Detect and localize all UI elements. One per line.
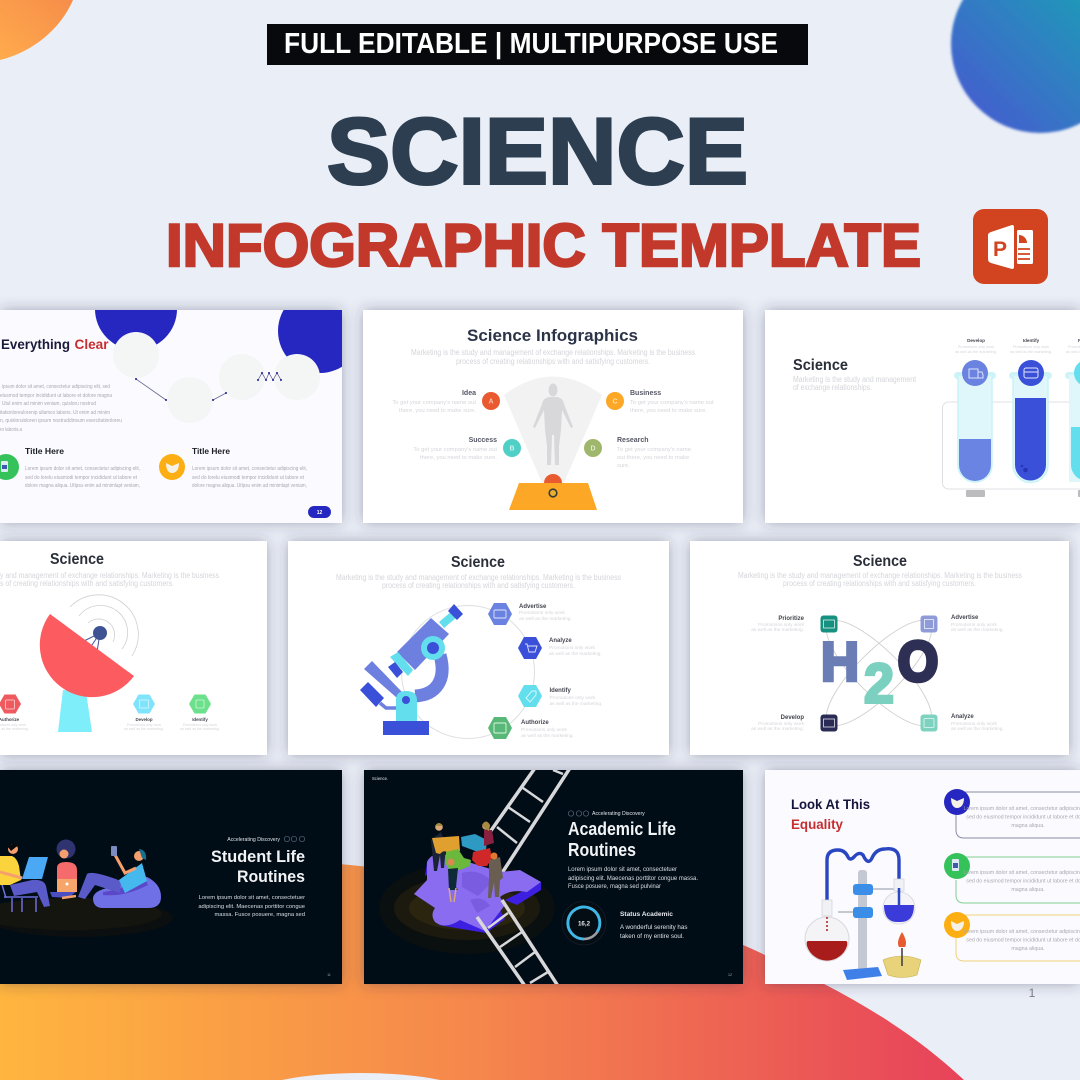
heading: Routines: [568, 840, 636, 860]
item: advertise: [488, 603, 572, 625]
item: business: To get your company's name out: [630, 400, 714, 406]
paragraph: n, quisloruisloren ipsum nostruddinsum exercitationloreu: [0, 418, 122, 424]
item: success: [413, 437, 521, 461]
ladder: upper: [490, 768, 570, 873]
item: yellow row: [944, 912, 1080, 961]
item: success: B: [509, 446, 515, 452]
item: research: [584, 437, 691, 469]
H2O letters: O: [898, 630, 938, 692]
body text: Lorem ipsum dolor sit amet, consectetuer: [199, 895, 305, 901]
rack: [942, 402, 1080, 497]
panel: everything clear slide: [0, 301, 351, 532]
tube: prioritize: [1065, 338, 1080, 482]
item: advertise: [920, 615, 1004, 633]
title: SCIENCE: [327, 98, 748, 204]
heading: Science Infographics: [467, 326, 638, 345]
item: identify: as well as the marketing.: [180, 727, 220, 731]
feature: title here right: [159, 446, 307, 489]
panel: test tubes slide: [765, 310, 1080, 523]
feature: title here right: dolore magna aliqua. Utlpsu enim ad minimlapt veniam,: [192, 483, 307, 489]
heading: [211, 847, 305, 886]
heading: Student Life: [211, 847, 305, 866]
panel: student life slide: [0, 770, 342, 984]
feature: title here left: Title Here: [25, 446, 64, 456]
item: advertise: Advertise: [951, 615, 979, 621]
heading: [791, 796, 870, 832]
page number: 11: [327, 973, 331, 977]
brand: Science.: [372, 776, 388, 781]
item: develop: Promotions only work: [127, 723, 161, 727]
panel: microscope slide: [288, 541, 669, 755]
people illustration: [0, 840, 173, 937]
item: authorize: Authorize: [521, 720, 549, 726]
H2O letters: H: [821, 630, 859, 692]
tube: develop: as well as the marketing.: [955, 350, 997, 354]
panel: satellite dish slide: [0, 541, 267, 755]
item: prioritize: [751, 616, 838, 633]
item: advertise: as well as the marketing.: [951, 627, 1004, 633]
heading: Science: [50, 551, 104, 568]
orbit ring: [402, 606, 534, 738]
page pill: [308, 506, 331, 518]
item: research: To get your company's name: [617, 447, 691, 453]
feature: title here right: sed do lorelu eiusmodi tempor incididunt ut labore et: [192, 475, 304, 481]
heading: Routines: [237, 867, 305, 886]
item: business: there, you need to make sure.: [630, 408, 707, 414]
tube: identify: as well as the marketing.: [1010, 350, 1052, 354]
intro text: [411, 348, 695, 366]
intro text: [738, 571, 1022, 588]
item: identify: as well as the marketing.: [550, 701, 602, 707]
body text: Fusce posuere, magna sed pulvinar: [568, 883, 661, 890]
item: develop: [124, 694, 164, 731]
item: authorize: [0, 694, 29, 731]
intro text: process of creating relationships with and satisfying customers.: [783, 579, 976, 588]
intro text: [336, 573, 621, 590]
paragraph: eiusmod tempor incididunt ut labore et dolore magna: [0, 393, 112, 399]
item: develop: Develop: [781, 715, 804, 721]
item: success: To get your company's name out: [413, 447, 497, 453]
light fan: [504, 376, 602, 485]
body text: [198, 895, 305, 918]
item: prioritize: Promotions only work: [758, 622, 805, 628]
intro text: of exchange relationships.: [793, 383, 872, 392]
kicker: [568, 811, 645, 817]
status text: A wonderful serenity has: [620, 924, 687, 931]
body text: [568, 866, 698, 890]
decorative circle: top right: [951, 0, 1080, 133]
puzzle platform: [414, 853, 541, 933]
item: idea: Idea: [462, 390, 476, 397]
intro text: [793, 375, 917, 392]
status text: taken of my entire soul.: [620, 933, 684, 940]
banner: FULL EDITABLE | MULTIPURPOSE USE: [284, 28, 778, 60]
heading: Science: [853, 553, 907, 570]
item: business: C: [612, 398, 618, 406]
item: idea: [392, 390, 500, 414]
item: analyze: Analyze: [549, 638, 572, 644]
heading: Everything: [1, 336, 70, 352]
feature: title here left: dolore magna aliqua. Utlpsu enim ad minimlapt veniam,: [25, 483, 140, 489]
panel: science infographics slide: [363, 310, 743, 523]
heading: Equality: [791, 816, 843, 832]
gauge: [562, 901, 606, 945]
item: blue row: [944, 789, 1080, 838]
feature: title here right: Lorem ipsum dolor sit amet, consectetur adipiscing elit,: [192, 466, 307, 472]
item: success: Success: [469, 437, 497, 444]
item: identify: Promotions only work: [550, 695, 596, 701]
paragraph: itationloreulorenip ullamco laboris. Ut enim ad minim: [0, 410, 111, 416]
human silhouette: [533, 384, 573, 465]
tube: identify: Identify: [1023, 338, 1040, 343]
item: advertise: Promotions only work: [951, 622, 997, 628]
item: research: D: [590, 446, 596, 452]
item: green row: magna aliqua.: [1011, 887, 1045, 893]
body text: adipiscing elit. Maecenas porttitor congue: [198, 904, 305, 910]
paragraph: ipsum dolor sit amet, consectetur adipiscing elit, sed: [2, 384, 110, 390]
item: success: there, you need to make sure.: [420, 455, 497, 461]
tube: identify: Promotions only work: [1013, 345, 1049, 349]
blue circles: [95, 310, 342, 373]
item: analyze: Analyze: [951, 714, 974, 720]
gauge: 16,2: [578, 920, 591, 928]
dish illustration: [40, 595, 138, 732]
page number: 12: [728, 973, 732, 977]
tube: develop: [954, 338, 997, 482]
heading: [1, 336, 109, 352]
H2O letters: 2: [864, 652, 894, 714]
heading: Look At This: [791, 796, 870, 812]
tube: identify: [1009, 338, 1052, 482]
item: develop: as well as the marketing.: [751, 726, 804, 732]
icon: PowerPoint: [973, 209, 1048, 284]
decorative blob: top left: [0, 0, 73, 60]
item: develop: [751, 714, 838, 732]
chemistry illustration: [805, 849, 921, 980]
item: identify: [518, 685, 602, 707]
subtitle: INFOGRAPHIC TEMPLATE: [166, 212, 921, 279]
page pill: 12: [317, 510, 322, 516]
item: analyze: as well as the marketing.: [549, 651, 602, 657]
item: develop: as well as the marketing.: [124, 727, 164, 731]
item: idea: A: [488, 398, 494, 406]
item: advertise: as well as the marketing.: [519, 616, 572, 622]
item: develop: Promotions only work: [758, 721, 805, 727]
team with puzzle pieces: [431, 822, 503, 902]
item: identify: Identify: [550, 688, 571, 694]
item: identify: [180, 694, 220, 731]
decorative wave: bottom gradient: [0, 861, 964, 1080]
dotted circles and connectors: [113, 332, 320, 423]
status text: [620, 911, 687, 940]
panel: academic life slide: [364, 768, 743, 986]
panel: equality slide: [765, 770, 1080, 984]
intro text: Marketing is the study and management: [793, 375, 917, 384]
kicker: Accelerating Discovery: [592, 811, 645, 817]
feature: title here left: [0, 446, 140, 489]
kicker: Accelerating Discovery: [227, 837, 280, 843]
intro text: [0, 571, 219, 588]
item: advertise: Advertise: [519, 604, 547, 610]
paragraph: [0, 384, 122, 433]
feature: title here left: sed do lorelu eiusmodi tempor incididunt ut labore et: [25, 475, 137, 481]
item: research: Research: [617, 437, 649, 444]
item: authorize: as well as the marketing.: [521, 733, 574, 739]
microscope: [360, 604, 463, 735]
item: idea: To get your company's name out: [392, 400, 476, 406]
floor rings: [379, 862, 555, 954]
item: identify: Identify: [192, 717, 208, 722]
item: research: out there, you need to make: [617, 455, 689, 461]
item: advertise: Promotions only work: [519, 610, 565, 616]
heading: [568, 819, 676, 860]
intro text: process of creating relationships with and satisfying customers.: [456, 357, 650, 366]
item: analyze: Promotions only work: [549, 645, 595, 651]
item: research: sure.: [617, 463, 630, 469]
item: analyze: as well as the marketing.: [951, 726, 1004, 732]
H2O letters: [821, 630, 938, 714]
paragraph: ro laboris.a: [0, 427, 22, 433]
feature: title here right: Title Here: [192, 446, 230, 456]
decorative ellipse: bottom notch: [251, 1073, 471, 1080]
tube: develop: Develop: [967, 338, 985, 343]
body text: massa. Fusce posuere, magna sed: [214, 912, 305, 918]
item: business: Business: [630, 390, 661, 397]
heading: Clear: [74, 336, 109, 352]
item: green row: [944, 853, 1080, 903]
ladder: lower: [477, 900, 558, 986]
intro text: y and management of exchange relationships. Marketing is the business: [0, 571, 219, 580]
intro text: process of creating relationships with and satisfying customers.: [382, 581, 575, 590]
item: prioritize: Prioritize: [778, 616, 805, 622]
body text: adipiscing elit. Maecenas porttitor congue massa.: [568, 875, 698, 882]
intro text: Marketing is the study and management of exchange relationships. Marketing is the business: [411, 348, 695, 357]
item: authorize: [488, 717, 574, 739]
feature: title here left: Lorem ipsum dolor sit amet, consectetur adipiscing elit,: [25, 466, 140, 472]
status text: Status Academic: [620, 911, 673, 918]
item: analyze: [920, 714, 1004, 732]
heading: Science: [793, 357, 848, 374]
item: business: [606, 390, 714, 414]
item: idea: there, you need to make sure.: [399, 408, 476, 414]
item: blue row: magna aliqua.: [1011, 823, 1045, 829]
panel: H2O slide: [690, 541, 1069, 755]
item: analyze: Promotions only work: [951, 721, 997, 727]
paragraph: Utul enim ad minim veniam, quisloru nostrud: [2, 401, 96, 407]
projector base: [509, 474, 597, 510]
item: yellow row: magna aliqua.: [1011, 946, 1045, 952]
tube: develop: Promotions only work: [958, 345, 994, 349]
item: authorize: Promotions only work: [521, 727, 567, 733]
icon: PowerPoint: P: [993, 238, 1007, 261]
item: prioritize: as well as the marketing.: [751, 627, 804, 633]
page number: 1: [1029, 986, 1036, 1000]
intro text: Marketing is the study and management of exchange relationships. Marketing is the business: [738, 571, 1022, 580]
item: develop: Develop: [135, 717, 153, 722]
intro text: s of creating relationships with and satisfying customers.: [0, 579, 174, 588]
item: identify: Promotions only work: [183, 723, 217, 727]
intro text: Marketing is the study and management of exchange relationships. Marketing is the business: [336, 573, 621, 582]
kicker: [227, 836, 305, 843]
heading: Academic Life: [568, 819, 676, 839]
item: analyze: [518, 637, 602, 659]
body text: Lorem ipsum dolor sit amet, consectetuer: [568, 866, 677, 873]
heading: Science: [451, 554, 505, 571]
orbits: [813, 607, 945, 739]
